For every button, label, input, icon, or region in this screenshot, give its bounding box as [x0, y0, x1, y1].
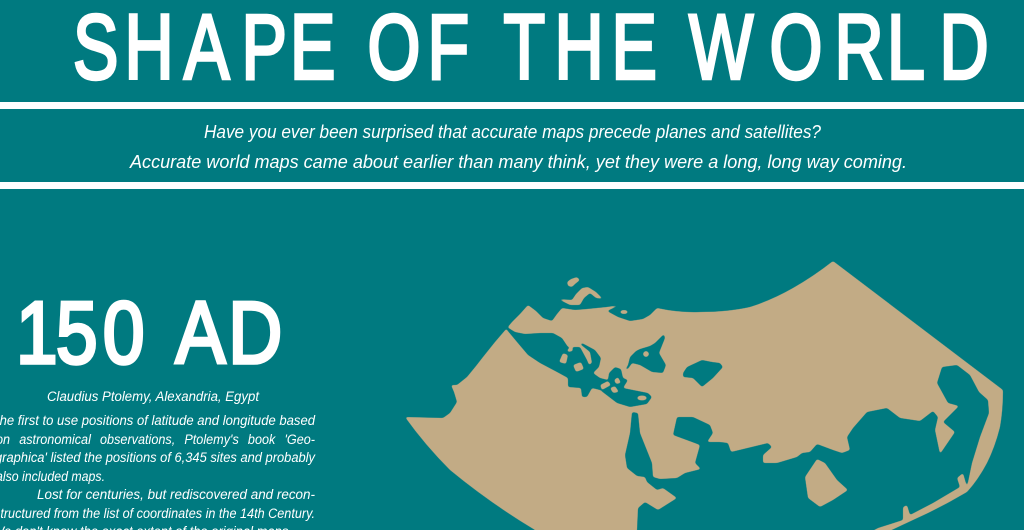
text block: Ptolemy description: graphica' listed the positions of 6,345 sites and probably — [0, 450, 316, 465]
water: Caspian Sea — [683, 360, 723, 387]
text block: Ptolemy description — [0, 389, 316, 530]
intro text: Have you ever been surprised that accurate maps precede planes and satellites? — [204, 122, 821, 142]
land: Mediterranean islands — [559, 310, 849, 530]
intro text — [129, 122, 907, 172]
water: Mediterranean — [507, 327, 652, 407]
author line: Claudius Ptolemy, Alexandria, Egypt — [47, 389, 260, 404]
land: Crimea — [643, 351, 649, 357]
text block: Ptolemy description: structured from the list of coordinates in the 14th Century. — [0, 506, 315, 521]
intro text: Accurate world maps came about earlier than many think, yet they were a long, long way coming. — [129, 152, 907, 172]
text block: Ptolemy description: the first to use positions of latitude and longitude based — [0, 413, 315, 428]
land: Taprobane island — [805, 459, 848, 507]
text block: Ptolemy description: Lost for centuries, but rediscovered and recon- — [37, 487, 315, 502]
water: Indian Ocean and Red Sea — [625, 365, 989, 530]
date heading: 150 AD: 150 AD — [16, 285, 282, 383]
land: northern islands — [558, 277, 603, 305]
water: Black Sea — [625, 334, 666, 373]
text block: Ptolemy description: on astronomical observations, Ptolemy's book 'Geo- — [0, 432, 315, 447]
map: Ptolemy's world — [380, 240, 1024, 530]
